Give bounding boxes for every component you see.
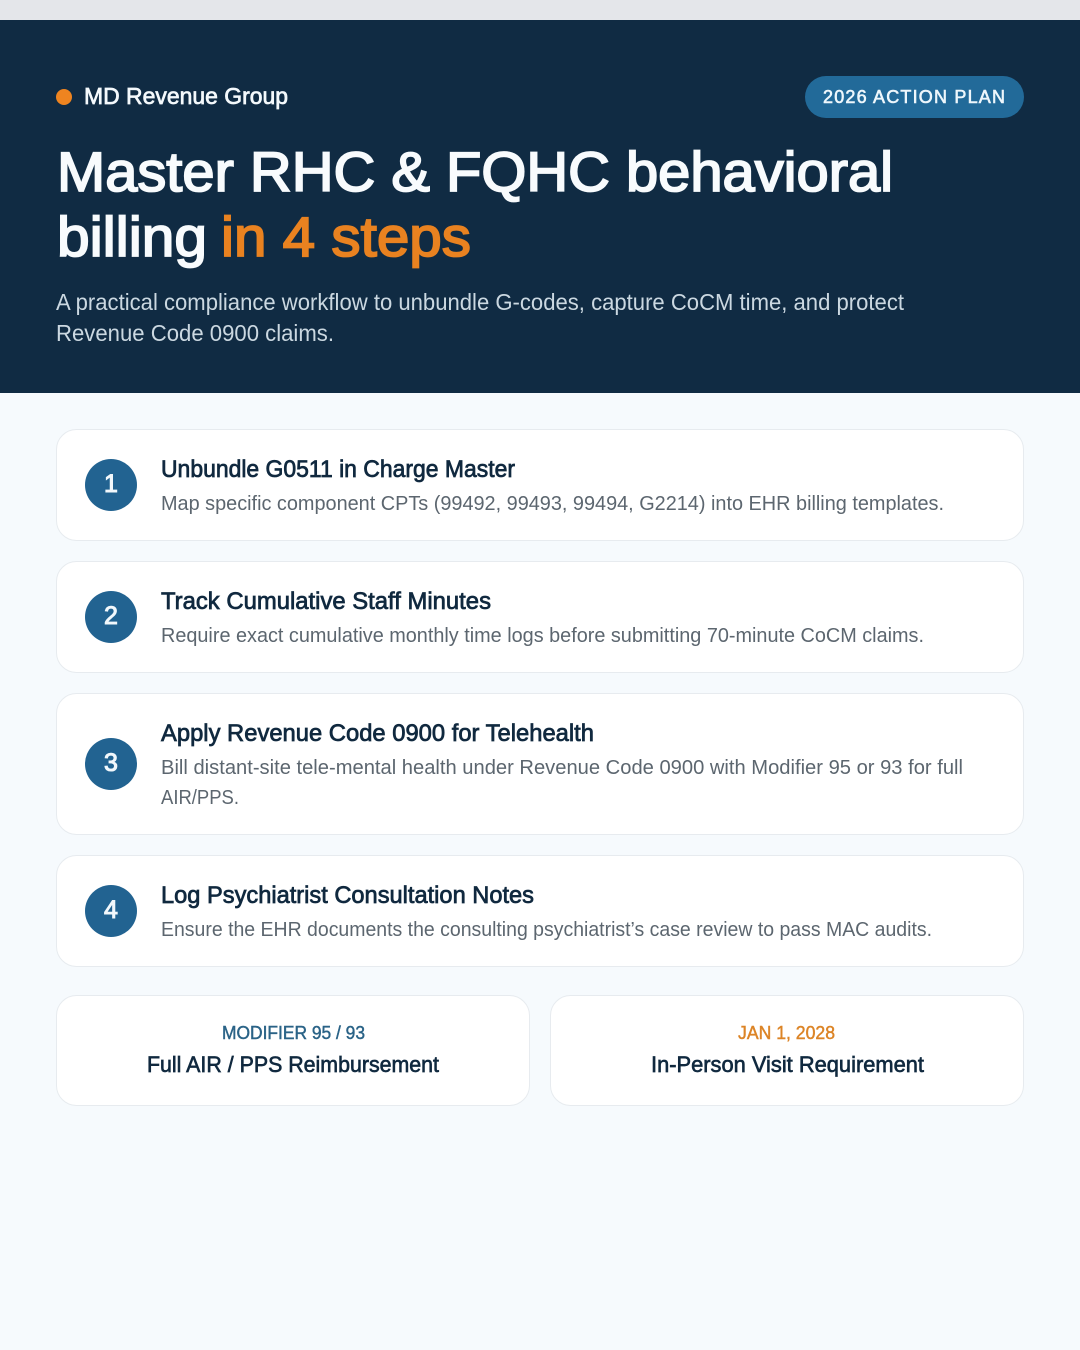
subtitle: A practical compliance workflow to unbundle G-codes, capture CoCM time, and protect <box>56 289 905 315</box>
step 3 heading: Apply Revenue Code 0900 for Telehealth <box>161 720 594 747</box>
step number 3 <box>85 738 137 790</box>
callout: Jan 1, 2028 <box>550 996 1024 1106</box>
header panel <box>0 20 1080 393</box>
step 1 heading: Unbundle G0511 in Charge Master <box>161 456 515 483</box>
step number 3: 3 <box>104 749 118 777</box>
step number 4: 4 <box>104 896 118 924</box>
callout value: In-Person Visit Requirement <box>651 1052 924 1077</box>
step card 1 <box>56 430 1024 540</box>
title <box>57 140 893 268</box>
step number 4 <box>85 885 137 937</box>
step 4 description: Ensure the EHR documents the consulting psychiatrist’s case review to pass MAC audits. <box>161 918 932 941</box>
callout value: Full AIR / PPS Reimbursement <box>147 1052 439 1077</box>
subtitle: Revenue Code 0900 claims. <box>56 320 334 346</box>
callout label: MODIFIER 95 / 93 <box>222 1023 365 1043</box>
badge: 2026 action plan <box>805 76 1024 118</box>
step card 3 <box>56 694 1024 834</box>
step 4 heading: Log Psychiatrist Consultation Notes <box>161 882 534 909</box>
step 2 heading: Track Cumulative Staff Minutes <box>161 588 491 615</box>
step number 2 <box>85 591 137 643</box>
subtitle <box>56 289 905 346</box>
callout: modifier 95 / 93 <box>56 996 530 1106</box>
step card 4 <box>56 856 1024 966</box>
badge: 2026 action plan: 2026 ACTION PLAN <box>823 87 1005 107</box>
step 2 description: Require exact cumulative monthly time logs before submitting 70-minute CoCM claims. <box>161 624 924 647</box>
step number 2: 2 <box>104 602 118 630</box>
step number 1: 1 <box>104 470 118 498</box>
title: Master RHC & FQHC behavioral <box>57 140 893 203</box>
brand: MD Revenue Group: MD Revenue Group <box>84 83 288 109</box>
step 3 description <box>161 756 963 809</box>
step number 1 <box>85 459 137 511</box>
title: billing <box>57 205 207 268</box>
step 3 description: Bill distant-site tele-mental health under Revenue Code 0900 with Modifier 95 or 93 for full <box>161 756 963 779</box>
title: in 4 steps <box>221 205 471 268</box>
step card 2 <box>56 562 1024 672</box>
step 1 description: Map specific component CPTs (99492, 99493, 99494, G2214) into EHR billing templates. <box>161 492 944 515</box>
step 3 description: AIR/PPS. <box>161 786 239 809</box>
callout label: JAN 1, 2028 <box>738 1023 835 1043</box>
